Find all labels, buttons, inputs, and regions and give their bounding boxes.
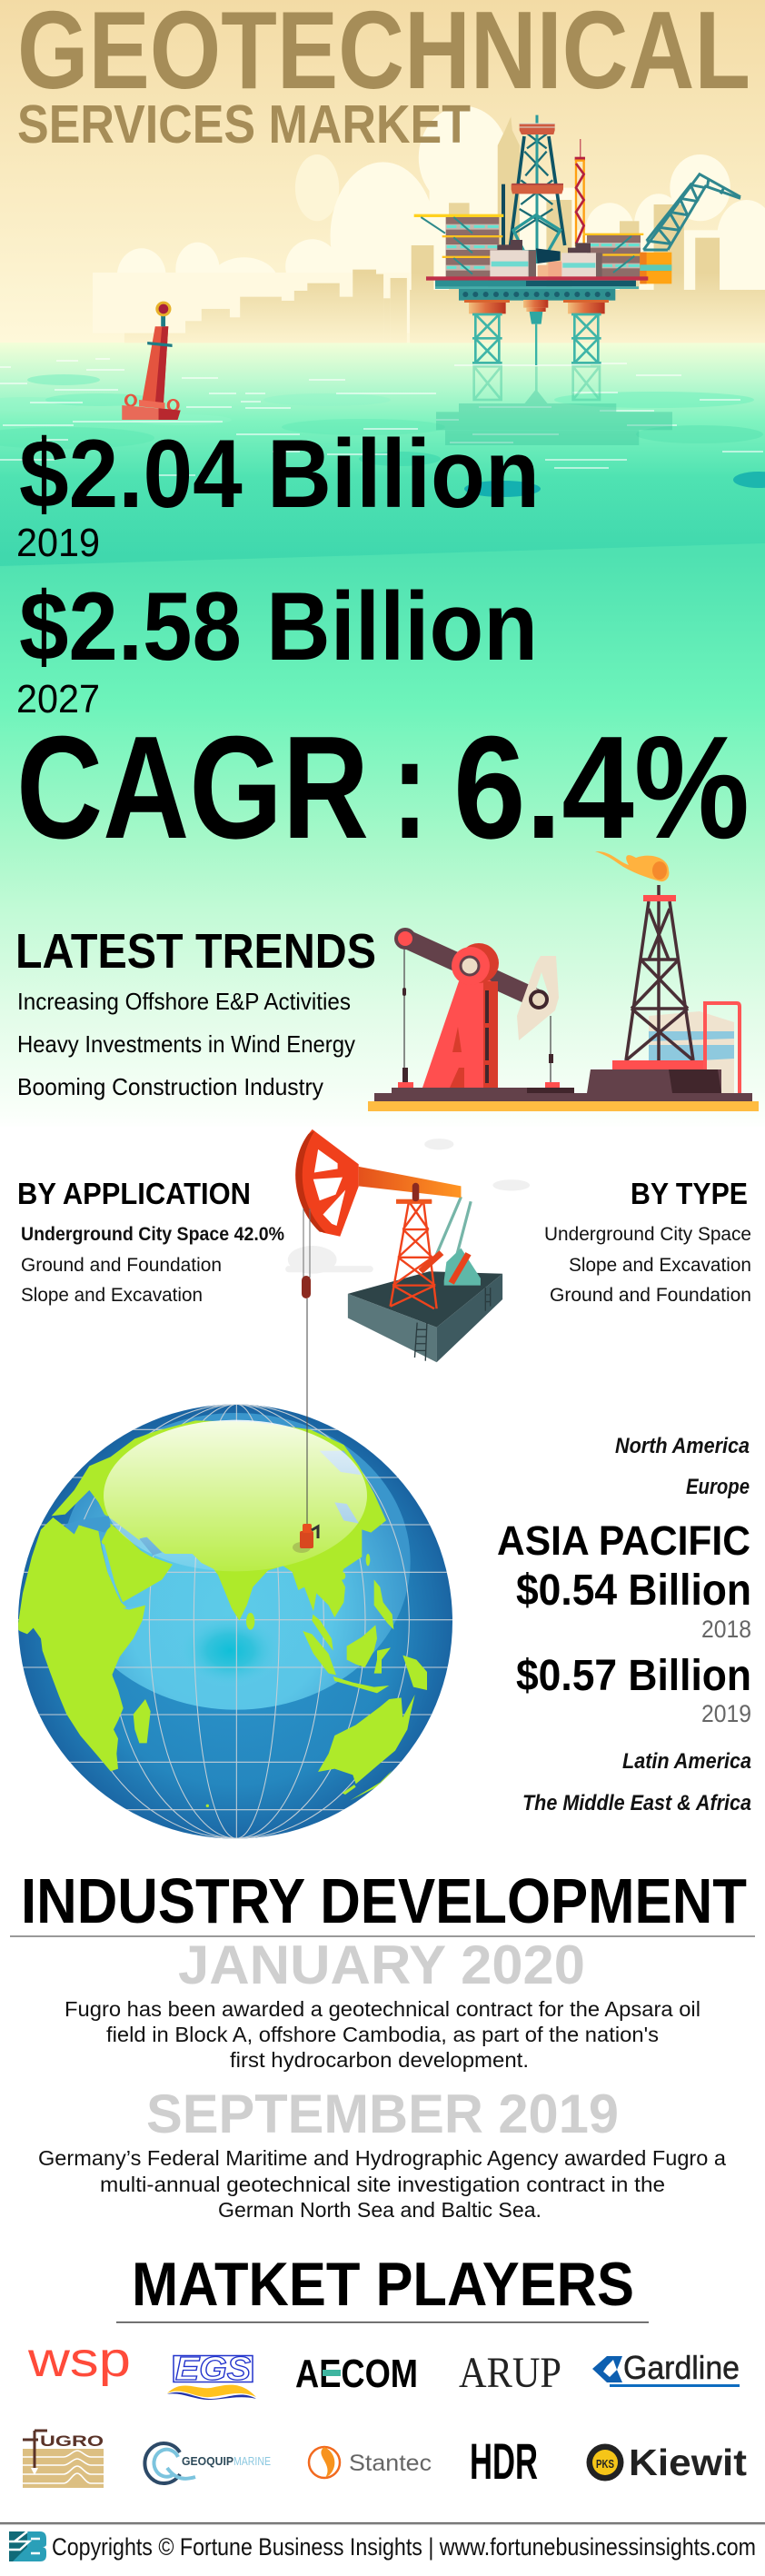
storage tank: [649, 1003, 740, 1093]
September paragraph: Germany’s Federal Maritime and Hydrographic Agency awarded Fugro a: [38, 2146, 727, 2170]
type list: Slope and Excavation: [569, 1254, 751, 1276]
trends list: [17, 988, 355, 1100]
regions list: 2019: [701, 1700, 751, 1727]
application list: Underground City Space 42.0%: [21, 1223, 284, 1245]
ocean glow: [62, 1413, 411, 1710]
regions list: North America: [615, 1434, 750, 1458]
orange container: [640, 253, 671, 283]
logo: AECOM: AECOM: [295, 2352, 418, 2396]
application list: [21, 1223, 284, 1306]
January paragraph: field in Block A, offshore Cambodia, as part of the nation's: [106, 2023, 659, 2046]
logo: Kiewit: PKS: [596, 2457, 614, 2471]
walking beam: [405, 939, 539, 1000]
heading: market players: MATKET PLAYERS: [132, 2250, 634, 2319]
development: January 2020: [65, 1934, 700, 2072]
logo: Kiewit: Kiewit: [629, 2442, 747, 2483]
grid lines: [14, 1399, 459, 1845]
water patches: [0, 374, 765, 497]
logo: EGS: [167, 2350, 256, 2400]
inland and coastal seas: [65, 1451, 362, 1610]
development: January 2020: JANUARY 2020: [178, 1934, 585, 1995]
clouds and city skyline: [93, 106, 765, 343]
icon: buoy: [122, 302, 181, 420]
type list: Ground and Foundation: [550, 1284, 751, 1306]
icon: pumpjack and derrick with flare: [368, 851, 759, 1111]
logo: Kiewit: [587, 2442, 747, 2483]
right module: [583, 234, 643, 277]
polar highlight: [104, 1420, 367, 1571]
pitman and crank: [421, 1197, 481, 1286]
red tower: [575, 139, 585, 245]
machine base: [368, 1060, 759, 1111]
deck houses and tanks: [490, 240, 602, 277]
cable and drill bit: [293, 1208, 318, 1553]
heading: by type: BY TYPE: [631, 1177, 748, 1210]
stat: CAGR: :: [392, 706, 428, 870]
stat: 2027 market size: $2.58 Billion: [19, 572, 538, 681]
year 2027: 2027: [16, 677, 100, 721]
type list: Underground City Space: [544, 1223, 751, 1245]
regions list: 2018: [701, 1616, 751, 1643]
regions list: Europe: [686, 1475, 750, 1499]
pontoons and legs: [464, 300, 609, 365]
logo: Geoquip Marine: GEOQUIP: [182, 2454, 233, 2468]
development: September 2019: SEPTEMBER 2019: [146, 2084, 619, 2144]
September paragraph: [38, 2146, 727, 2222]
polished rods: [398, 950, 560, 1088]
pump hub: [459, 943, 499, 983]
base block: [348, 1271, 502, 1362]
September paragraph: German North Sea and Baltic Sea.: [218, 2198, 541, 2222]
logo: EGS: EGS: [175, 2350, 251, 2387]
development: September 2019: [38, 2084, 727, 2222]
logo: WSP: wsp: [27, 2332, 131, 2387]
icon: globe: [14, 1399, 459, 1845]
logo: ARUP: ARUP: [459, 2349, 561, 2397]
Asia Pacific 2018: $0.54 Billion: [516, 1566, 751, 1615]
January paragraph: [65, 1997, 700, 2072]
Asia Pacific 2019: $0.57 Billion: [516, 1652, 751, 1700]
type list: [544, 1223, 751, 1306]
counterweight: [517, 956, 559, 1040]
logo: Stantec: [309, 2447, 432, 2478]
icon: pumpjack over the globe: [285, 1129, 530, 1362]
icon: offshore oil platform: [414, 115, 740, 445]
year 2019: 2019: [16, 521, 100, 565]
continents: [14, 1420, 427, 1807]
logo: Gardline: Gardline: [623, 2349, 740, 2386]
logo: Fugro: [23, 2431, 104, 2488]
clouds: [285, 1139, 530, 1274]
stat: CAGR: CAGR: [16, 706, 369, 870]
logo: Geoquip Marine: [144, 2443, 271, 2483]
footer logo: [7, 2531, 46, 2561]
left module: [414, 214, 503, 277]
application list: Ground and Foundation: [21, 1254, 222, 1276]
pump tower: [422, 974, 498, 1088]
trends list: Heavy Investments in Wind Energy: [17, 1030, 355, 1058]
logo: Fugro: UGRO: [40, 2432, 104, 2450]
trends list: Booming Construction Industry: [17, 1073, 323, 1100]
regions list: [497, 1434, 751, 1815]
January paragraph: Fugro has been awarded a geotechnical contract for the Apsara oil: [65, 1997, 700, 2021]
trends list: Increasing Offshore E&P Activities: [17, 988, 351, 1015]
stat: 2019 market size: [16, 419, 540, 565]
other regions: Latin America: [622, 1749, 751, 1774]
stat: 2019 market size: $2.04 Billion: [19, 419, 540, 528]
derrick: [511, 115, 565, 264]
deck and hull: [426, 276, 648, 301]
stat: CAGR: [16, 706, 750, 870]
title: Services Market: SERVICES MARKET: [17, 94, 471, 154]
logo: HDR: HDR: [470, 2432, 538, 2490]
panel: hero scene background: [0, 0, 765, 1127]
logo: Geoquip Marine: MARINE: [233, 2454, 271, 2468]
flare: [595, 851, 669, 881]
Asia Pacific heading: ASIA PACIFIC: [497, 1517, 750, 1564]
crane: [643, 174, 740, 250]
horsehead and beam: [295, 1129, 461, 1237]
lattice tower: [391, 1201, 437, 1308]
heading: latest trends: LATEST TRENDS: [15, 924, 376, 979]
heading: by application: BY APPLICATION: [17, 1177, 251, 1210]
logo: Stantec: Stantec: [349, 2451, 432, 2476]
January paragraph: first hydrocarbon development.: [230, 2048, 529, 2072]
September paragraph: multi-annual geotechnical site investigation contract in the: [100, 2173, 665, 2196]
derrick tower: [626, 885, 693, 1060]
application list: Slope and Excavation: [21, 1284, 203, 1306]
rig reflection: [436, 366, 672, 445]
stat: 2027 market size: [16, 572, 538, 721]
sea glints: [0, 359, 763, 475]
